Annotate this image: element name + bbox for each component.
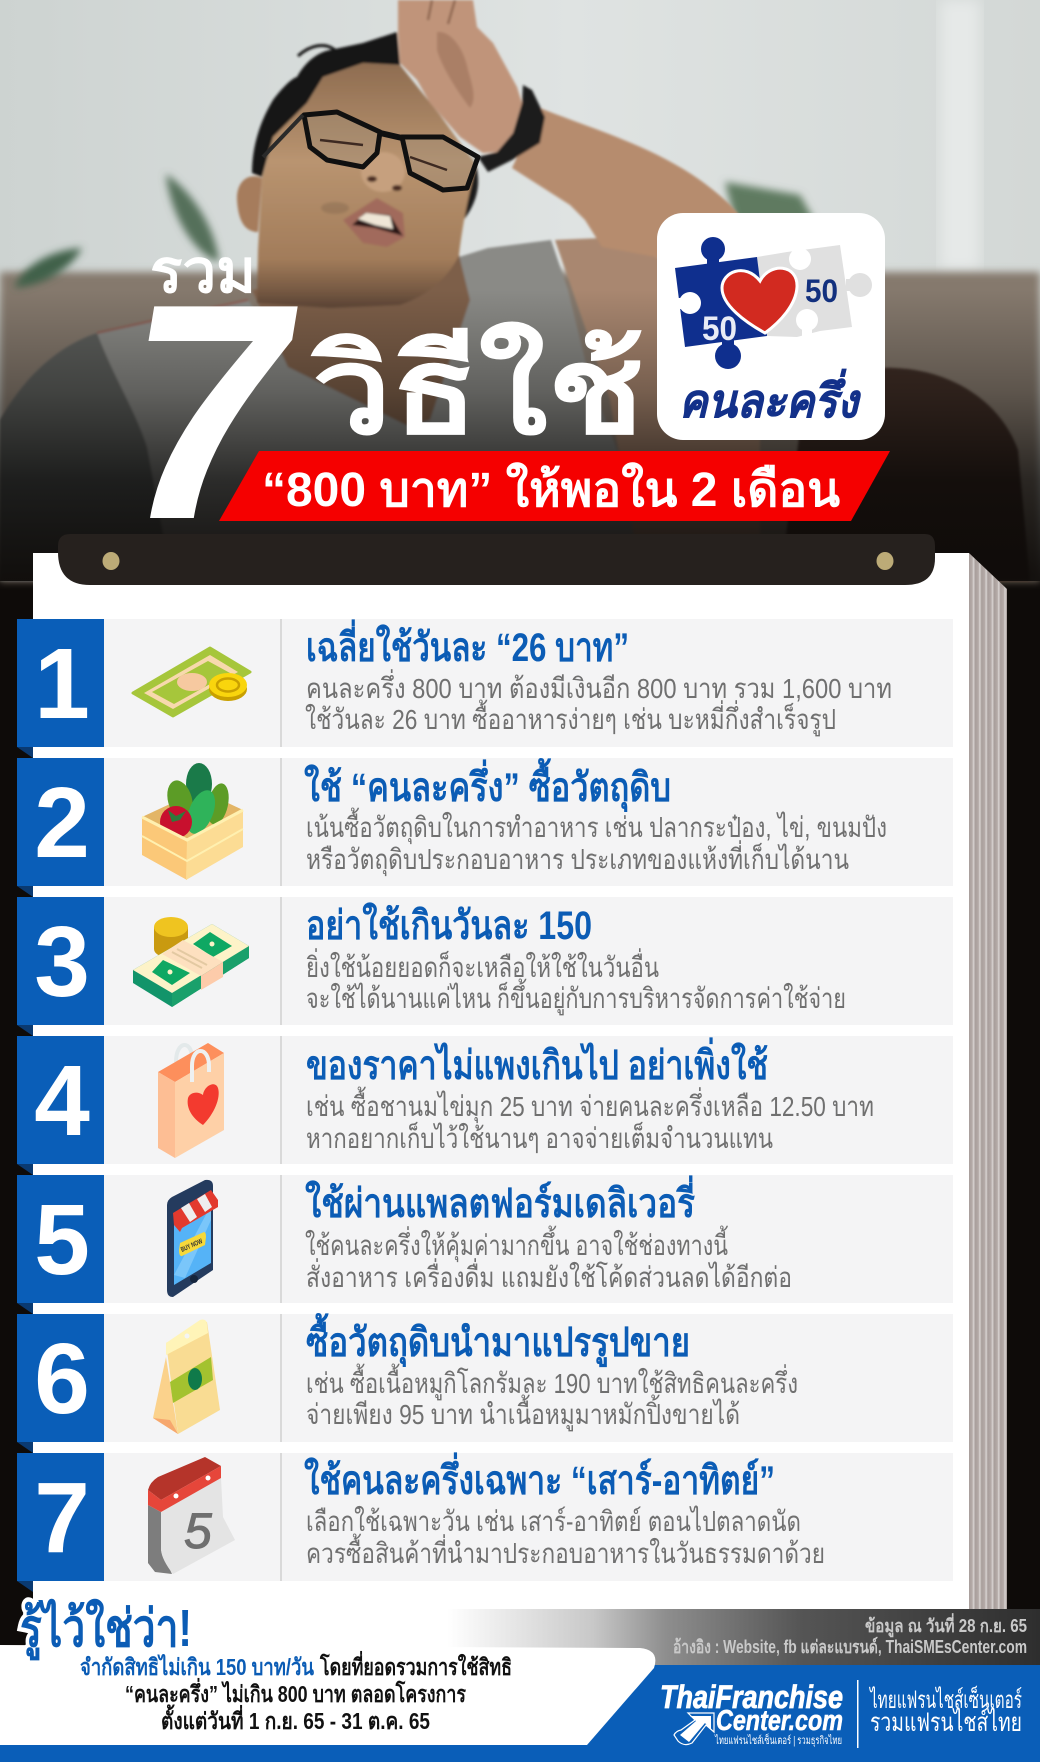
icon: logo arrow <box>674 1713 714 1745</box>
callout text: ตั้งแต่วันที่ 1 ก.ย. 65 - 31 ต.ค. 65 <box>161 1704 430 1734</box>
icon: crate of vegetables <box>142 763 243 880</box>
logo wordmark: คนละครึ่ง <box>679 368 861 427</box>
label: 50 white: 50 <box>702 310 737 348</box>
brand logo: ThaiFranchise Center.com <box>660 1679 843 1747</box>
logo card: คนละครึ่ง <box>657 213 885 440</box>
red banner <box>219 451 890 521</box>
label: 50 navy: 50 <box>805 273 838 309</box>
clip rivet right <box>876 552 894 570</box>
notebook clip bar <box>58 534 935 585</box>
title: รวม: รวม <box>150 238 256 305</box>
title: วิธีใช้: วิธีใช้ <box>310 321 644 459</box>
step 3: 3 <box>34 906 90 1018</box>
step 2: เน้นซื้อวัตถุดิบในการทำอาหาร เช่น ปลากระป๋อง, ไข่, ขนมปัง <box>306 807 887 845</box>
icon: smartphone storefront <box>167 1180 218 1297</box>
icon: shopping bag with heart <box>158 1043 224 1158</box>
step 6: 6 <box>34 1323 90 1435</box>
notebook page edge stack <box>969 553 1007 1620</box>
step 6: ซื้อวัตถุดิบนำมาแปรรูปขาย <box>306 1313 690 1368</box>
step 1 <box>17 619 953 758</box>
step 5: ใช้ผ่านแพลตฟอร์มเดลิเวอรี่ <box>305 1175 695 1226</box>
step 4: หากอยากเก็บไว้ใช้นานๆ อาจจ่ายเต็มจำนวนแทน <box>306 1121 773 1154</box>
step 3: จะใช้ได้นานแค่ไหน ก็ขึ้นอยู่กับการบริหารจัดการค่าใช้จ่าย <box>306 978 846 1016</box>
step 6 <box>17 1313 953 1453</box>
brand logo: ThaiFranchise Center.com: ThaiFranchise <box>660 1679 843 1715</box>
brand tagline <box>869 1685 1022 1737</box>
source note <box>673 1613 1027 1657</box>
callout text: จำกัดสิทธิไม่เกิน 150 บาท/วัน <box>80 1653 314 1680</box>
step 7 <box>17 1452 953 1592</box>
brand divider <box>857 1680 858 1748</box>
step 4: 4 <box>34 1045 90 1157</box>
step 6: เช่น ซื้อเนื้อหมูกิโลกรัมละ 190 บาทใช้สิทธิคนละครึ่ง <box>306 1363 798 1401</box>
icon: smartphone storefront: BUY NOW <box>180 1238 204 1254</box>
step 5: สั่งอาหาร เครื่องดื่ม แถมยังใช้โค้ดส่วนลดได้อีกต่อ <box>306 1258 792 1293</box>
step 5: 5 <box>34 1184 90 1296</box>
notebook white page <box>33 553 969 1623</box>
callout text <box>80 1650 512 1734</box>
brand logo: ThaiFranchise Center.com: ไทยแฟรนไชส์เซ็นเตอร์ | รวมธุรกิจไทย <box>714 1733 842 1747</box>
step 1: 1 <box>34 628 90 740</box>
callout heading: รู้ไว้ใช่ว่า! <box>20 1598 192 1661</box>
icon: ingredient packet <box>153 1320 220 1434</box>
callout text: โดยที่ยอดรวมการใช้สิทธิ <box>319 1650 512 1680</box>
icon: puzzle left piece <box>672 237 767 369</box>
step 5: ใช้คนละครึ่งให้คุ้มค่ามากขึ้น อาจใช้ช่องทางนี้ <box>305 1225 728 1263</box>
footer blue base <box>0 1665 1040 1762</box>
step 4: เช่น ซื้อชานมไข่มุก 25 บาท จ่ายคนละครึ่งเหลือ 12.50 บาท <box>306 1086 874 1124</box>
glasses <box>263 112 478 190</box>
title: big number 7: 7 <box>95 240 322 584</box>
icon: banknote and coin <box>133 648 250 716</box>
header photo: tired man holding his forehead <box>0 0 1040 581</box>
icon: puzzle right piece <box>757 244 872 340</box>
step 4: ของราคาไม่แพงเกินไป อย่าเพิ่งใช้ <box>306 1037 768 1088</box>
step 1: คนละครึ่ง 800 บาท ต้องมีเงินอีก 800 บาท รวม 1,600 บาท <box>306 669 892 704</box>
step 6: จ่ายเพียง 95 บาท นำเนื้อหมูมาหมักปิ้งขายได้ <box>306 1394 740 1432</box>
callout text: “คนละครึ่ง” ไม่เกิน 800 บาท ตลอดโครงการ <box>125 1677 466 1707</box>
footer gradient band <box>0 1609 1040 1669</box>
step 2: ใช้ “คนละครึ่ง” ซื้อวัตถุดิบ <box>304 758 671 813</box>
step 1: ใช้วันละ 26 บาท ซื้ออาหารง่ายๆ เช่น บะหมี่กึ่งสำเร็จรูป <box>305 699 836 737</box>
step 3: ยิ่งใช้น้อยยอดก็จะเหลือให้ใช้ในวันอื่น <box>306 948 659 983</box>
step 7: เลือกใช้เฉพาะวัน เช่น เสาร์-อาทิตย์ ตอนไปตลาดนัด <box>306 1505 801 1537</box>
step 2 <box>17 758 953 897</box>
icon: tear-off calendar <box>148 1457 235 1574</box>
icon: tear-off calendar: 5 <box>184 1503 212 1559</box>
step 7: 7 <box>34 1462 90 1574</box>
step 5 <box>17 1175 953 1314</box>
step 7: ควรซื้อสินค้าที่นำมาประกอบอาหารในวันธรรมดาด้วย <box>306 1533 825 1569</box>
brand logo: ThaiFranchise Center.com: Center.com <box>716 1705 843 1737</box>
step 3: อย่าใช้เกินวันละ 150 <box>306 902 592 948</box>
step 7: ใช้คนละครึ่งเฉพาะ “เสาร์-อาทิตย์” <box>304 1452 775 1503</box>
icon: stack of money with coins <box>133 917 249 1007</box>
footer white callout panel <box>0 1645 655 1745</box>
step 2: 2 <box>34 767 90 879</box>
step 1: เฉลี่ยใช้วันละ “26 บาท” <box>306 619 629 670</box>
step 4 <box>17 1036 953 1175</box>
step 3 <box>17 897 953 1036</box>
red banner: “800 บาท” ให้พอใน 2 เดือน <box>262 461 840 517</box>
icon: heart <box>722 268 797 333</box>
step 2: หรือวัตถุดิบประกอบอาหาร ประเภทของแห้งที่เก็บได้นาน <box>306 840 849 877</box>
clip rivet left <box>102 552 120 570</box>
